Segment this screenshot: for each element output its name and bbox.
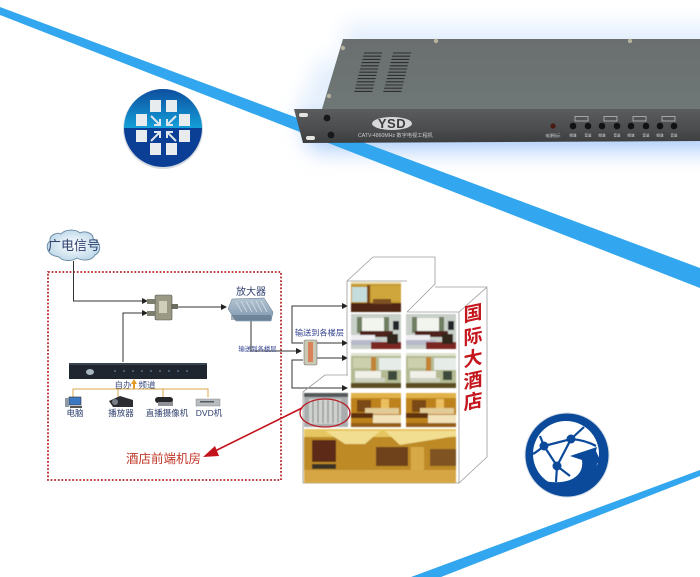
channel controls: 音量 [613, 132, 621, 138]
power indicator: 电源指示 [545, 133, 561, 138]
label: hotel head-end room: 酒店前端机房 [126, 451, 201, 466]
power indicator [545, 123, 561, 138]
icon: DVD player [196, 399, 220, 406]
combiner [147, 295, 178, 320]
hotel name vertical sign: 际 [463, 324, 483, 350]
head-end unit [69, 363, 207, 379]
bottom blue diagonal stripe [411, 470, 700, 577]
label: feed to floors (small): 输送到各楼层 [238, 344, 277, 353]
ventilation slots [354, 53, 411, 91]
source labels: DVD机 [196, 408, 223, 418]
device: rack-mount unit [294, 39, 700, 143]
hotel name vertical sign: 大 [463, 346, 483, 372]
server room photo [304, 393, 348, 427]
label: local channel: 自办 [114, 380, 132, 390]
channel controls: 频道 [627, 132, 635, 138]
source labels: 直播摄像机 [146, 408, 189, 418]
channel controls: 频道 [569, 132, 577, 138]
floor splitter [304, 340, 317, 365]
lobby photo [304, 429, 456, 483]
red arrow to head-end room [203, 408, 302, 457]
device front panel [294, 109, 700, 143]
icon: globe network badge [524, 412, 610, 498]
red callout ellipse [300, 399, 350, 427]
icon: computer [65, 397, 82, 408]
YSD logo: YSD [378, 116, 406, 131]
cloud: broadcast signal [47, 230, 100, 261]
screws [327, 39, 632, 98]
building outline [303, 257, 487, 483]
arrowheads [142, 298, 348, 391]
label: feed to floors: 输送到各楼层 [295, 328, 344, 338]
label: local channel: 频道 [138, 380, 156, 390]
diagram: signal distribution [47, 230, 487, 483]
channel controls: 音量 [584, 132, 592, 138]
connector lines [74, 261, 343, 388]
cloud: broadcast signal: 广电信号 [48, 238, 100, 253]
model label: CATV-4860MHz 数字电视工程机 [358, 131, 434, 139]
red dotted boundary [48, 272, 281, 480]
source labels: 电脑 [66, 408, 84, 418]
device top face [322, 39, 700, 109]
hotel name vertical sign: 国 [463, 301, 483, 327]
source labels [66, 408, 223, 418]
mounting slots and jacks [299, 113, 334, 140]
channel controls [569, 116, 678, 138]
amplifier [228, 285, 273, 321]
hotel name vertical sign [463, 301, 483, 415]
room photos [351, 282, 456, 427]
channel controls: 频道 [598, 132, 606, 138]
hotel building [300, 257, 487, 483]
icon: converging arrows badge [123, 89, 203, 169]
orange source bus [73, 389, 208, 397]
label: local channel [114, 379, 156, 390]
icon: camcorder [155, 397, 173, 406]
channel controls: 音量 [670, 132, 678, 138]
icon: player [109, 396, 133, 407]
hotel name vertical sign: 酒 [463, 368, 483, 394]
channel controls: 音量 [642, 132, 650, 138]
glow behind device [300, 25, 700, 150]
top blue diagonal stripe [0, 7, 700, 288]
source labels: 播放器 [108, 408, 134, 418]
amplifier: 放大器 [236, 285, 266, 298]
hotel name vertical sign: 店 [463, 389, 483, 415]
channel controls: 频道 [656, 132, 664, 138]
